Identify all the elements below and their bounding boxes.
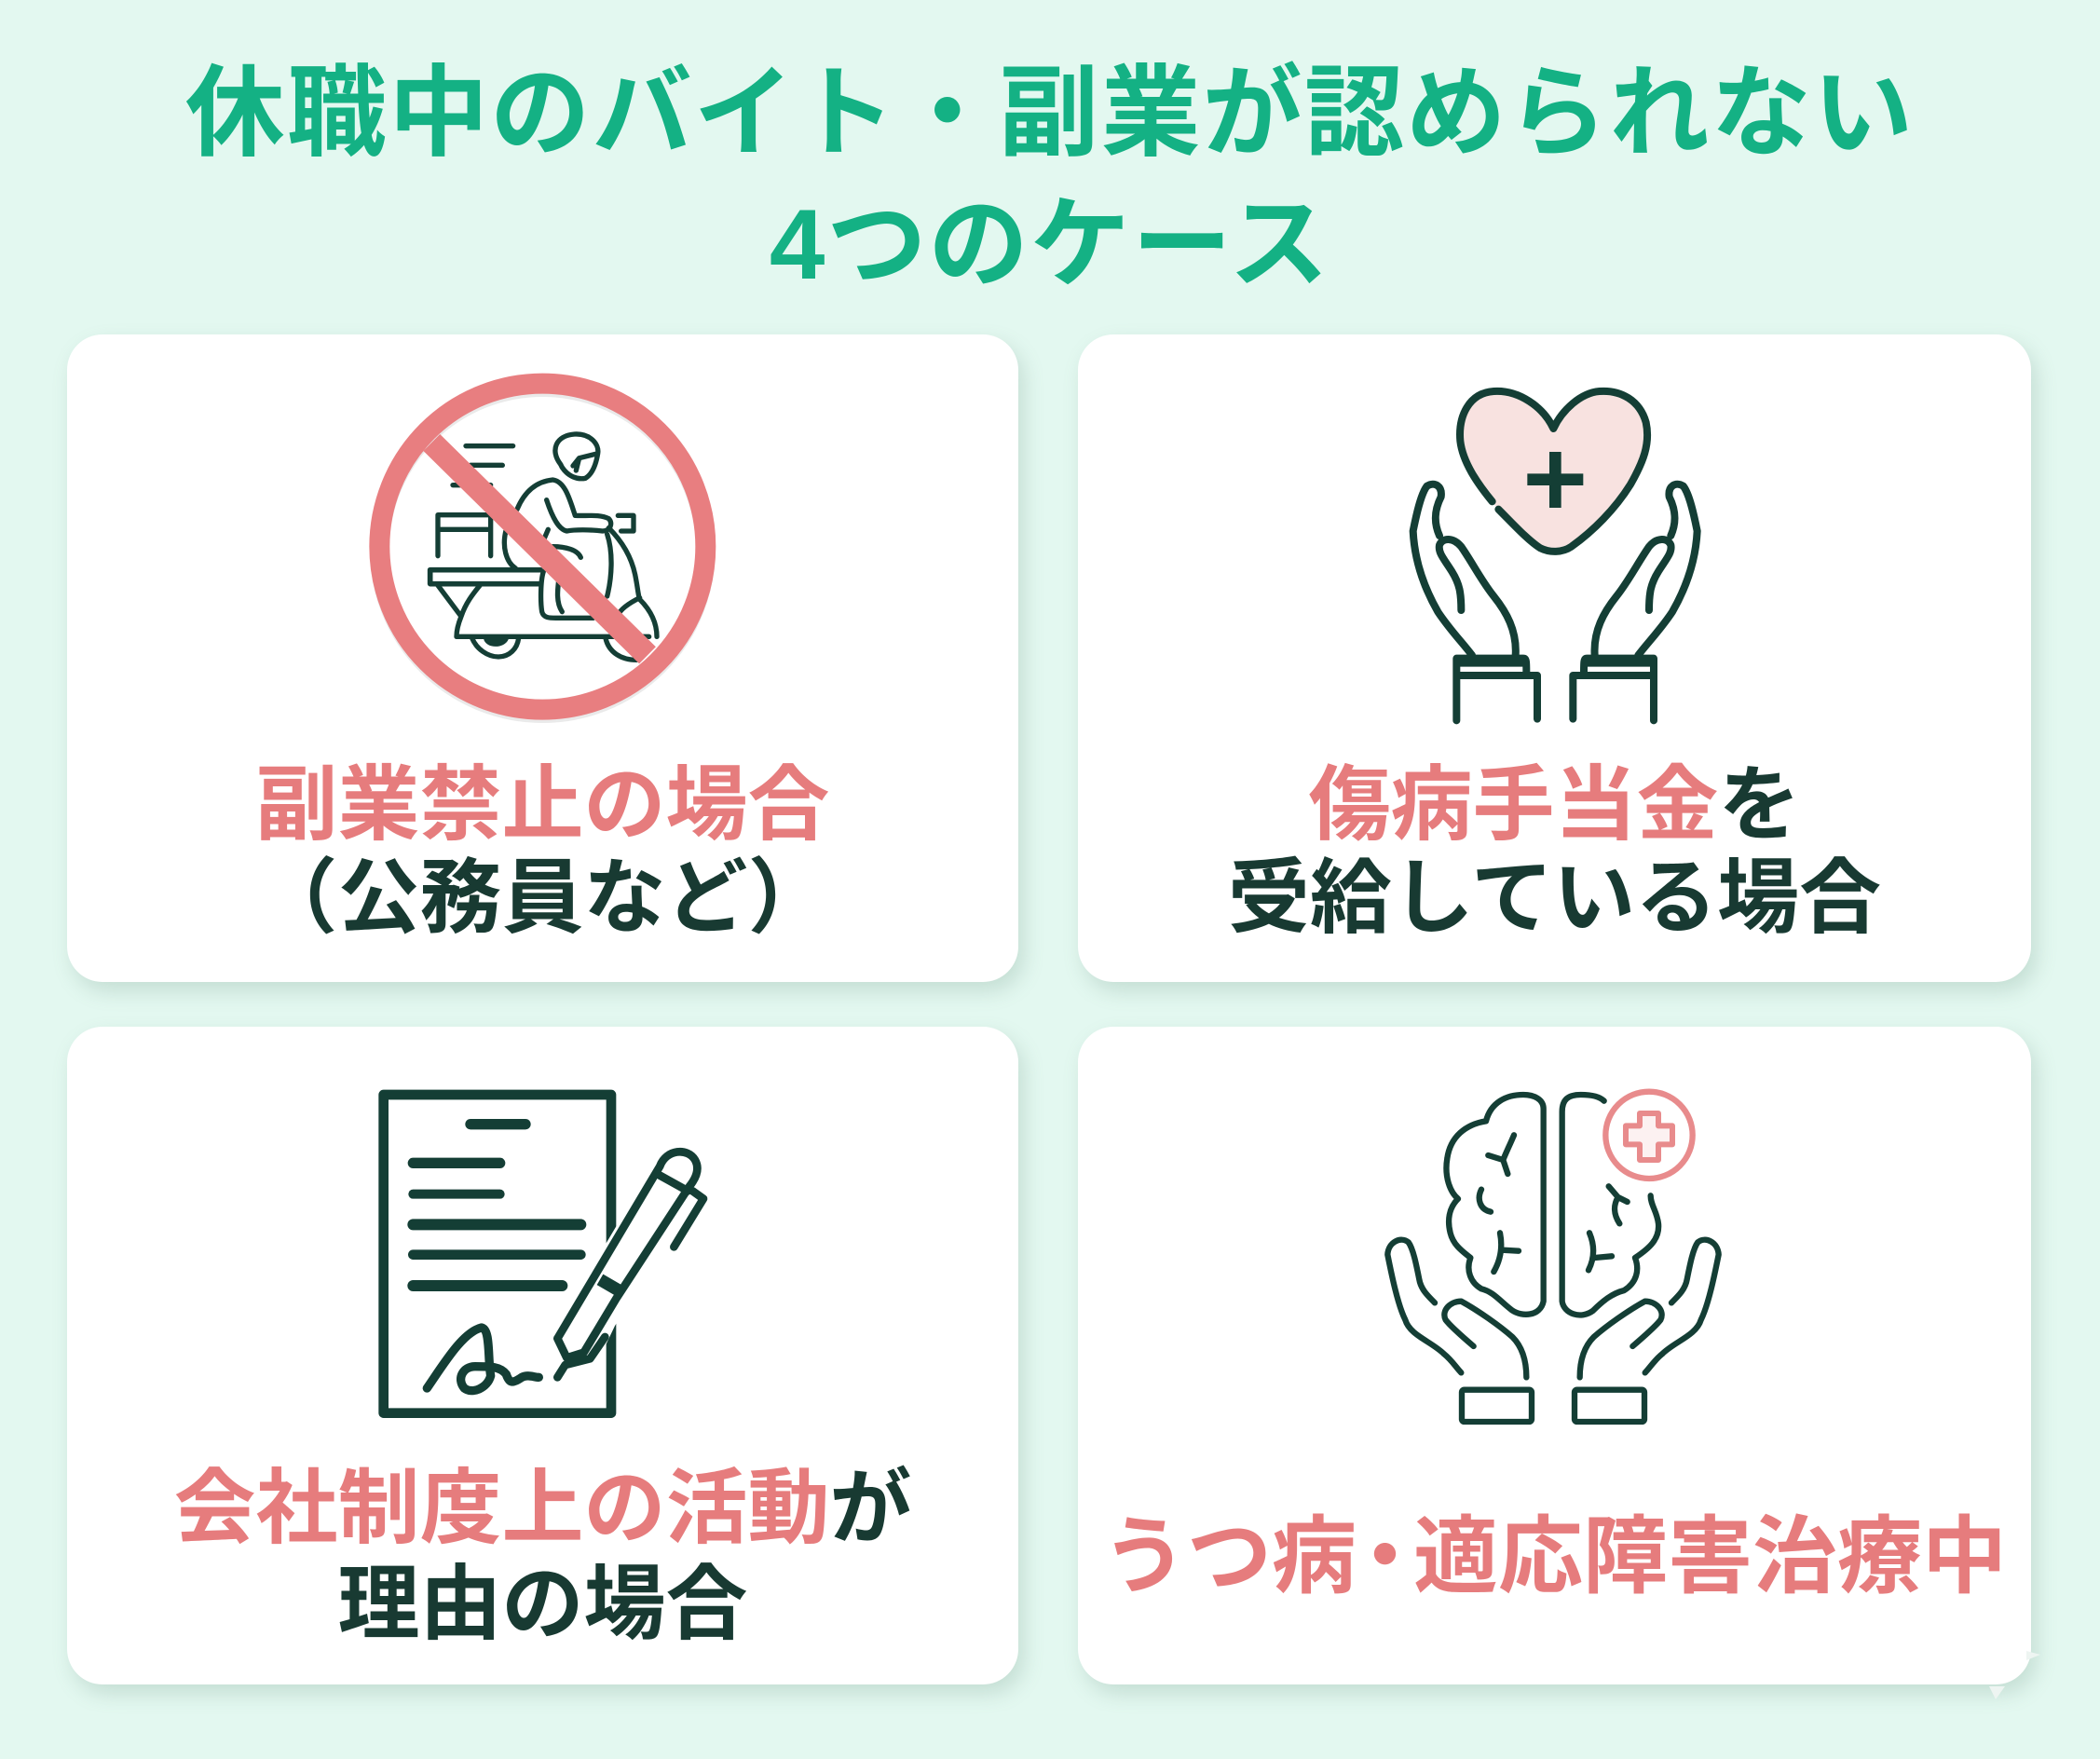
icon: no delivery scooter — [369, 373, 716, 723]
label: 理由の場合: 理由の場合 — [337, 1558, 747, 1650]
icon: brain in hands — [1384, 1088, 1722, 1425]
icon: hands holding heart — [1409, 388, 1701, 725]
label: 傷病手当金を: 傷病手当金を — [1308, 758, 1801, 851]
panel: side job prohibited — [67, 334, 1018, 982]
icon: document and pen — [378, 1090, 708, 1418]
label: うつ病・適応障害治療中: うつ病・適応障害治療中 — [1102, 1510, 2007, 1604]
label: 会社制度上の活動が: 会社制度上の活動が — [173, 1462, 912, 1554]
label: (公務員など): （公務員など） — [255, 852, 829, 944]
title — [185, 57, 1915, 300]
label: 副業禁止の場合: 副業禁止の場合 — [255, 758, 829, 851]
panel: company system — [67, 1027, 1018, 1684]
label: 受給している場合: 受給している場合 — [1228, 852, 1881, 944]
panel: sickness allowance — [1078, 334, 2031, 982]
title: 休職中のバイト・副業が認められない — [185, 57, 1915, 169]
panel: depression treatment — [1078, 1027, 2031, 1684]
title: 4つのケース — [770, 188, 1330, 300]
